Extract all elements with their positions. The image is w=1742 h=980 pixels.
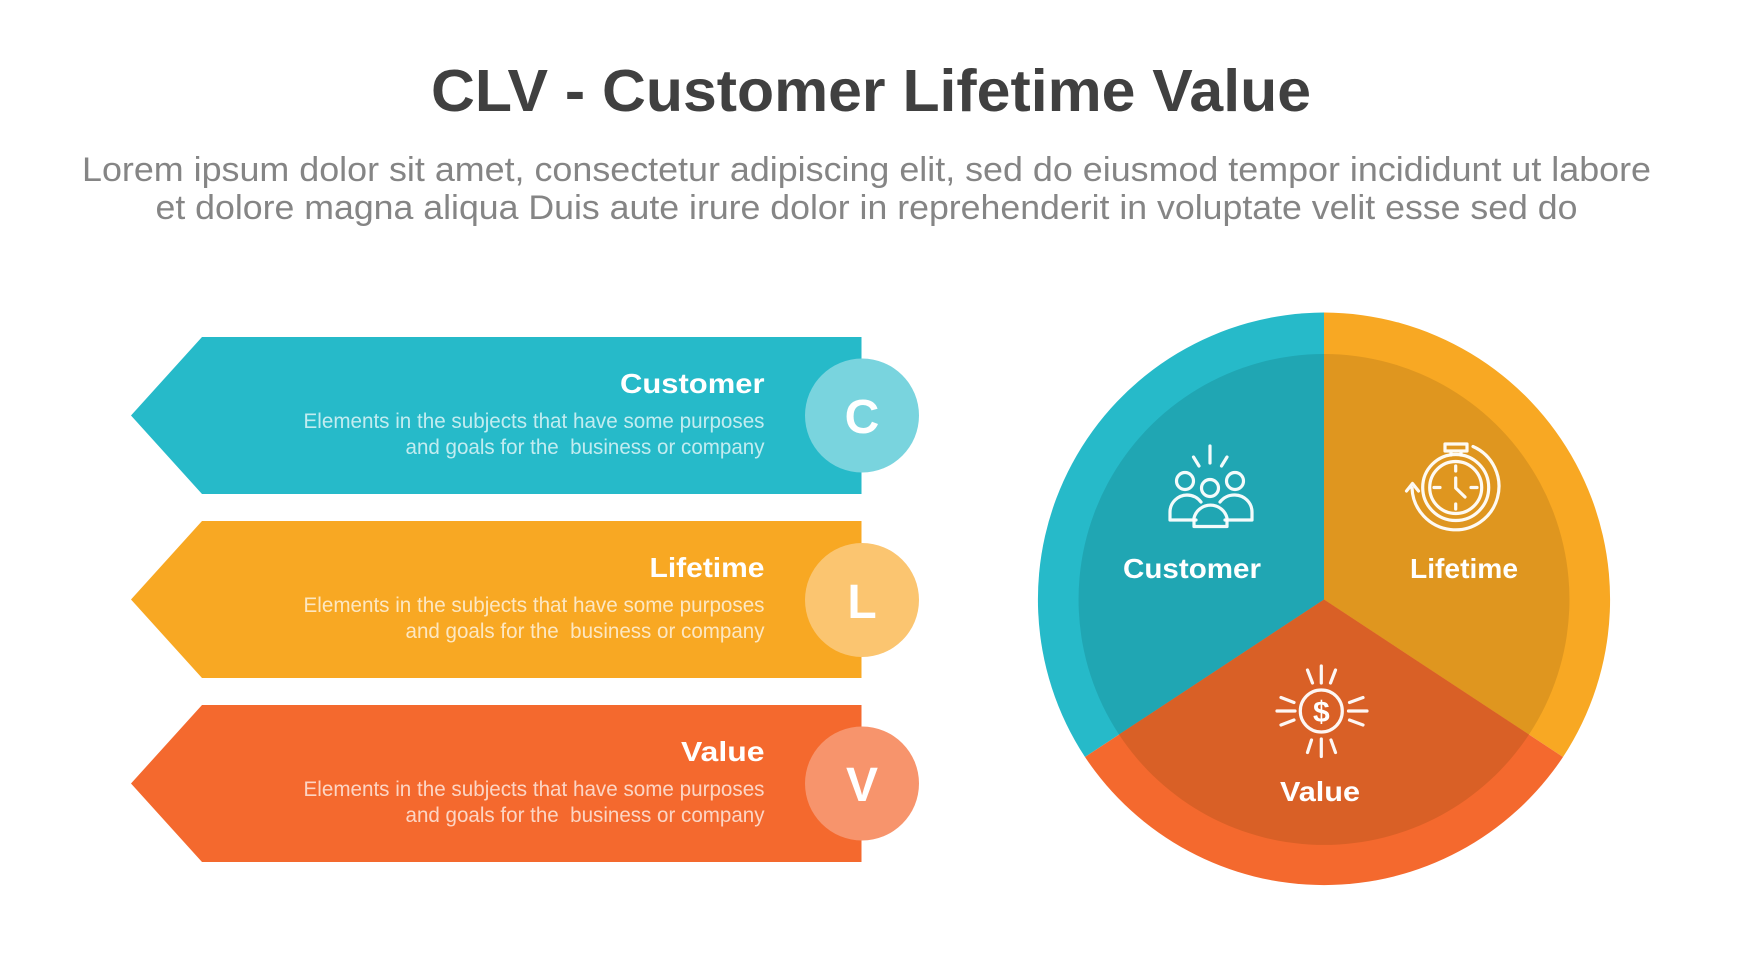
- label: value: Value: [1280, 776, 1360, 807]
- outer ring segment: customer: [1038, 312, 1324, 757]
- heading: customer: Customer: [620, 368, 765, 399]
- panel: customer arrow: [131, 337, 919, 494]
- description: lifetime: [304, 594, 765, 643]
- outer ring segment: value: [1085, 600, 1563, 885]
- arrow banner: lifetime: [131, 521, 862, 678]
- description: customer: [304, 410, 765, 459]
- icon: stopwatch: [1406, 444, 1499, 530]
- heading: lifetime: Lifetime: [650, 552, 764, 583]
- letter badge: L: [805, 543, 919, 657]
- letter badge: V: [805, 726, 919, 840]
- outer ring segment: lifetime: [1324, 312, 1610, 757]
- subtitle text: et dolore magna aliqua Duis aute irure dolor in reprehenderit in voluptate velit esse sed do: [156, 189, 1578, 227]
- icon: dollar burst: $: [1313, 696, 1330, 729]
- panel: value arrow: [131, 705, 919, 862]
- letter badge: C: C: [845, 391, 879, 444]
- label: customer: Customer: [1123, 553, 1261, 584]
- title: CLV - Customer Lifetime Value: [431, 58, 1311, 124]
- icon: customers group: [1170, 446, 1252, 526]
- inner segment: lifetime: [1324, 354, 1569, 734]
- letter badge: L: L: [847, 576, 877, 629]
- panel: lifetime arrow: [131, 521, 919, 678]
- inner segment: value: [1119, 600, 1529, 845]
- inner segment: customer: [1079, 354, 1324, 734]
- letter badge: V: V: [846, 759, 878, 812]
- subtitle text: Lorem ipsum dolor sit amet, consectetur adipiscing elit, sed do eiusmod tempor incididunt ut labore: [82, 151, 1651, 189]
- description: lifetime: and goals for the business or company: [406, 620, 765, 643]
- description: customer: and goals for the business or company: [406, 436, 765, 459]
- pie chart: [1038, 312, 1610, 885]
- description: value: and goals for the business or company: [406, 804, 765, 827]
- description: value: Elements in the subjects that have some purposes: [304, 778, 764, 801]
- arrow banner: customer: [131, 337, 862, 494]
- description: value: [304, 778, 765, 827]
- subtitle text: [82, 151, 1651, 227]
- heading: value: Value: [681, 736, 764, 767]
- arrow banner: value: [131, 705, 862, 862]
- icon: dollar burst: [1277, 666, 1367, 756]
- letter badge: C: [805, 358, 919, 472]
- description: customer: Elements in the subjects that have some purposes: [304, 410, 764, 433]
- description: lifetime: Elements in the subjects that have some purposes: [304, 594, 764, 617]
- label: lifetime: Lifetime: [1410, 553, 1518, 584]
